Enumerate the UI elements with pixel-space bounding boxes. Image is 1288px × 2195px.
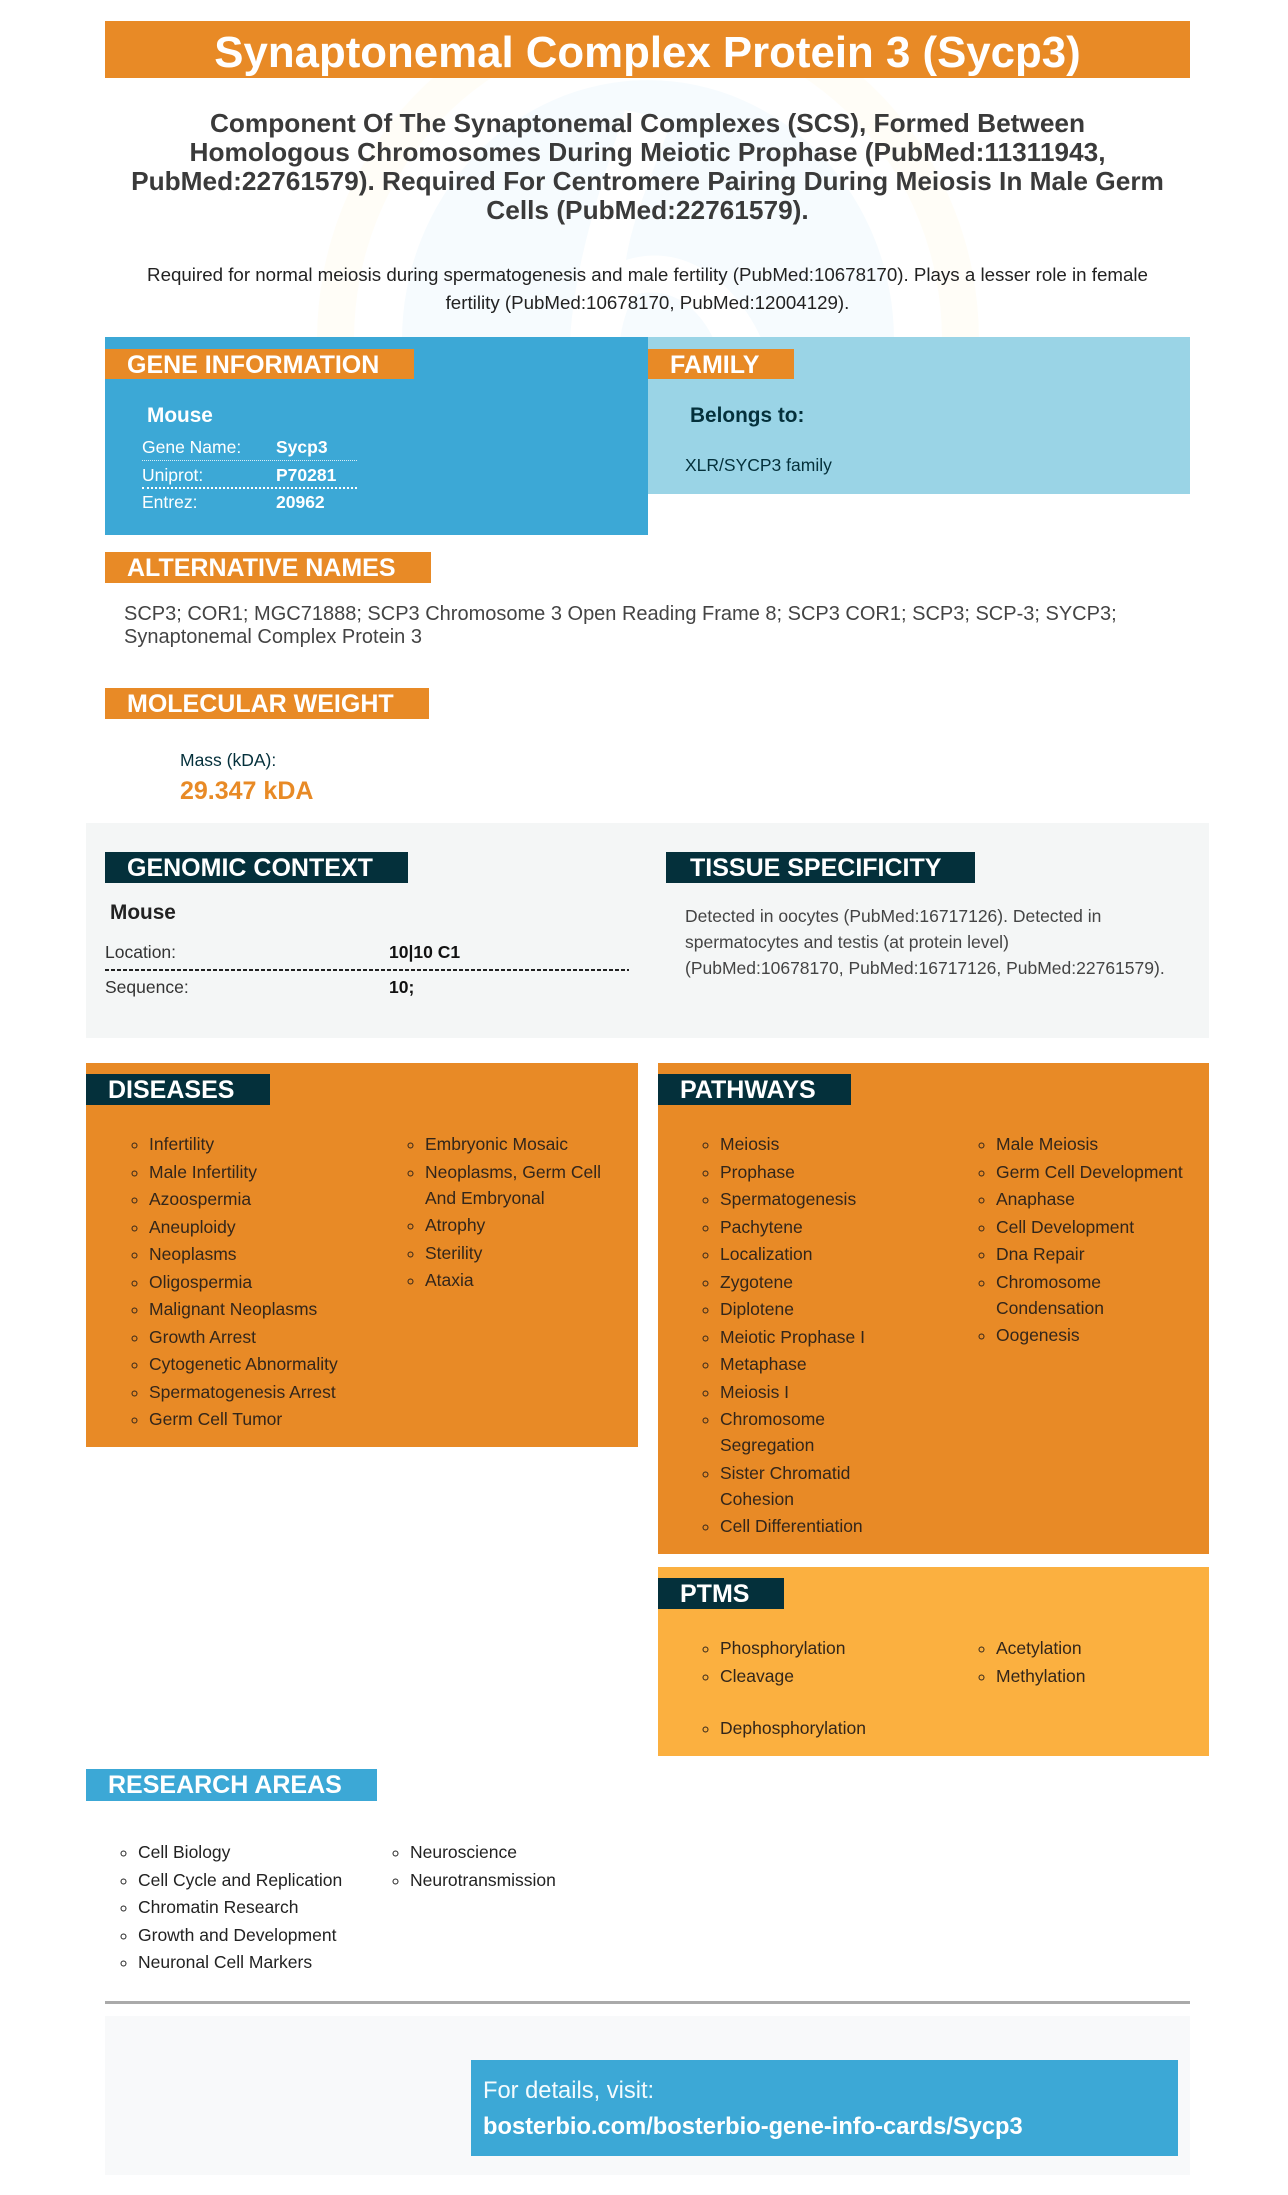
species label: Mouse <box>110 901 176 924</box>
details label: For details, visit: <box>483 2078 654 2104</box>
uniprot row <box>142 465 336 485</box>
dashed divider <box>105 969 629 971</box>
description: fertility (PubMed:10678170, PubMed:12004129). <box>446 292 849 313</box>
heading: family <box>648 349 794 379</box>
tissue specificity text: (PubMed:10678170, PubMed:16717126, PubMed:22761579). <box>685 958 1165 978</box>
research areas list column 1 <box>120 1842 342 1972</box>
diseases list column 1: Cytogenetic Abnormality <box>149 1354 338 1374</box>
alternative names text: SCP3; COR1; MGC71888; SCP3 Chromosome 3 Open Reading Frame 8; SCP3 COR1; SCP3; SCP-3; SYCP3; <box>124 603 1117 625</box>
description <box>147 264 1148 313</box>
diseases list column 1: Infertility <box>149 1134 214 1154</box>
uniprot row: P70281 <box>276 465 336 485</box>
panel: gene information <box>105 337 648 535</box>
heading: ptms <box>658 1578 784 1609</box>
title banner <box>105 21 1190 78</box>
research areas list column 2: Neuroscience <box>410 1842 517 1862</box>
heading: pathways: PATHWAYS <box>680 1076 816 1104</box>
heading: diseases: DISEASES <box>108 1076 234 1104</box>
entrez row: Entrez: <box>142 492 197 512</box>
tissue specificity text <box>685 906 1165 978</box>
research areas list column 2: Neurotransmission <box>410 1870 556 1890</box>
diseases list column 1: Aneuploidy <box>149 1216 236 1236</box>
diseases list column 1: Spermatogenesis Arrest <box>149 1382 336 1402</box>
heading: gene information: GENE INFORMATION <box>127 351 379 379</box>
diseases list column 1: Growth Arrest <box>149 1326 256 1346</box>
heading: research areas: RESEARCH AREAS <box>108 1771 342 1799</box>
pathways list column 1: Pachytene <box>720 1216 803 1236</box>
pathways list column 2: Germ Cell Development <box>996 1162 1183 1182</box>
heading: alternative names: ALTERNATIVE NAMES <box>127 554 396 582</box>
sequence row: Sequence: <box>105 977 189 997</box>
alternative names text: Synaptonemal Complex Protein 3 <box>124 626 422 648</box>
panel: pathways <box>658 1063 1209 1554</box>
panel: diseases <box>86 1063 638 1447</box>
ptms list column 1: Phosphorylation <box>720 1638 846 1658</box>
diseases list column 1: Malignant Neoplasms <box>149 1299 317 1319</box>
subtitle: Homologous Chromosomes During Meiotic Prophase (PubMed:11311943, <box>189 137 1106 167</box>
pathways list column 1: Prophase <box>720 1162 795 1182</box>
location row: Location: <box>105 942 176 962</box>
pathways list column 1: Sister Chromatid <box>720 1462 850 1482</box>
sequence row: 10; <box>389 977 414 997</box>
pathways list column 1 <box>702 1134 865 1536</box>
diseases list column 2: Sterility <box>425 1242 482 1262</box>
divider 2 <box>142 487 357 489</box>
research areas list column 1: Growth and Development <box>138 1924 336 1944</box>
pathways list column 1: Meiosis <box>720 1134 779 1154</box>
research areas list column 1: Chromatin Research <box>138 1897 298 1917</box>
footer panel <box>105 2016 1190 2175</box>
sequence row <box>105 977 414 997</box>
heading: pathways <box>658 1074 851 1105</box>
pathways list column 1: Zygotene <box>720 1272 793 1292</box>
subtitle: Component Of The Synaptonemal Complexes (SCS), Formed Between <box>210 108 1085 138</box>
pathways list column 1: Meiosis I <box>720 1382 789 1402</box>
diseases list column 1: Azoospermia <box>149 1189 251 1209</box>
family value: XLR/SYCP3 family <box>685 455 832 475</box>
pathways list column 1: Diplotene <box>720 1299 794 1319</box>
pathways list column 2: Anaphase <box>996 1189 1075 1209</box>
pathways list column 2: Oogenesis <box>996 1325 1080 1345</box>
pathways list column 1: Cohesion <box>720 1488 794 1508</box>
panel: genomic context and tissue specificity <box>86 823 1209 1038</box>
entrez row <box>142 492 325 512</box>
panel: ptms <box>658 1567 1209 1756</box>
pathways list column 2: Male Meiosis <box>996 1134 1098 1154</box>
pathways list column 2: Chromosome <box>996 1272 1101 1292</box>
details url: bosterbio.com/bosterbio-gene-info-cards/Sycp3 <box>483 2114 1023 2140</box>
ptms list column 1: Cleavage <box>720 1666 794 1686</box>
location row: 10|10 C1 <box>389 942 460 962</box>
ptms list column 1 <box>702 1638 866 1738</box>
subtitle <box>131 108 1164 225</box>
mass label: Mass (kDA): <box>180 750 276 770</box>
mass value: 29.347 kDA <box>180 777 313 805</box>
pathways list column 2: Condensation <box>996 1298 1104 1318</box>
pathways list column 2 <box>978 1134 1183 1345</box>
ptms list column 2: Methylation <box>996 1666 1086 1686</box>
research areas list column 1: Cell Cycle and Replication <box>138 1870 342 1890</box>
heading: genomic context: GENOMIC CONTEXT <box>127 854 373 882</box>
location row <box>105 942 460 962</box>
pathways list column 2: Cell Development <box>996 1216 1134 1236</box>
watermark logo <box>402 80 894 337</box>
panel: family <box>648 337 1190 494</box>
uniprot row: Uniprot: <box>142 465 203 485</box>
pathways list column 1: Cell Differentiation <box>720 1516 863 1536</box>
gene name row <box>142 437 328 457</box>
diseases list column 1: Oligospermia <box>149 1272 252 1292</box>
heading: family: FAMILY <box>670 351 759 379</box>
diseases list column 1: Neoplasms <box>149 1244 237 1264</box>
heading: tissue specificity: TISSUE SPECIFICITY <box>690 854 941 882</box>
pathways list column 1: Metaphase <box>720 1354 807 1374</box>
divider 1 <box>142 460 357 461</box>
research areas list column 1: Cell Biology <box>138 1842 230 1862</box>
belongs to label: Belongs to: <box>690 404 804 427</box>
gene name row: Sycp3 <box>276 437 328 457</box>
heading: diseases <box>86 1074 270 1105</box>
diseases list column 1: Male Infertility <box>149 1162 257 1182</box>
research areas list column 1: Neuronal Cell Markers <box>138 1952 312 1972</box>
diseases list column 2: Neoplasms, Germ Cell <box>425 1162 601 1182</box>
diseases list column 2: Embryonic Mosaic <box>425 1134 568 1154</box>
title banner: Synaptonemal Complex Protein 3 (Sycp3) <box>214 28 1081 77</box>
pathways list column 1: Segregation <box>720 1435 814 1455</box>
gene name row: Gene Name: <box>142 437 241 457</box>
alternative names text <box>124 603 1117 648</box>
heading: ptms: PTMS <box>680 1580 749 1608</box>
ptms list column 2 <box>978 1638 1086 1686</box>
diseases list column 1 <box>132 1134 338 1429</box>
pathways list column 1: Chromosome <box>720 1409 825 1429</box>
species label: Mouse <box>147 404 213 427</box>
pathways list column 1: Spermatogenesis <box>720 1189 856 1209</box>
research areas list column 2 <box>392 1842 556 1890</box>
diseases list column 2: Atrophy <box>425 1215 485 1235</box>
diseases list column 2 <box>408 1134 601 1290</box>
heading: molecular weight: MOLECULAR WEIGHT <box>127 690 394 718</box>
tissue specificity text: spermatocytes and testis (at protein level) <box>685 932 1009 952</box>
pathways list column 1: Localization <box>720 1244 812 1264</box>
subtitle: PubMed:22761579). Required For Centromere Pairing During Meiosis In Male Germ <box>131 166 1164 196</box>
pathways list column 2: Dna Repair <box>996 1244 1085 1264</box>
pathways list column 1: Meiotic Prophase I <box>720 1326 865 1346</box>
ptms list column 2: Acetylation <box>996 1638 1082 1658</box>
diseases list column 2: And Embryonal <box>425 1188 545 1208</box>
subtitle: Cells (PubMed:22761579). <box>486 195 809 225</box>
ptms list column 1: Dephosphorylation <box>720 1718 866 1738</box>
tissue specificity text: Detected in oocytes (PubMed:16717126). Detected in <box>685 906 1101 926</box>
call to action box <box>471 2060 1178 2156</box>
diseases list column 2: Ataxia <box>425 1270 474 1290</box>
diseases list column 1: Germ Cell Tumor <box>149 1409 282 1429</box>
entrez row: 20962 <box>276 492 325 512</box>
description: Required for normal meiosis during spermatogenesis and male fertility (PubMed:10678170). Plays a lesser role in female <box>147 264 1148 285</box>
